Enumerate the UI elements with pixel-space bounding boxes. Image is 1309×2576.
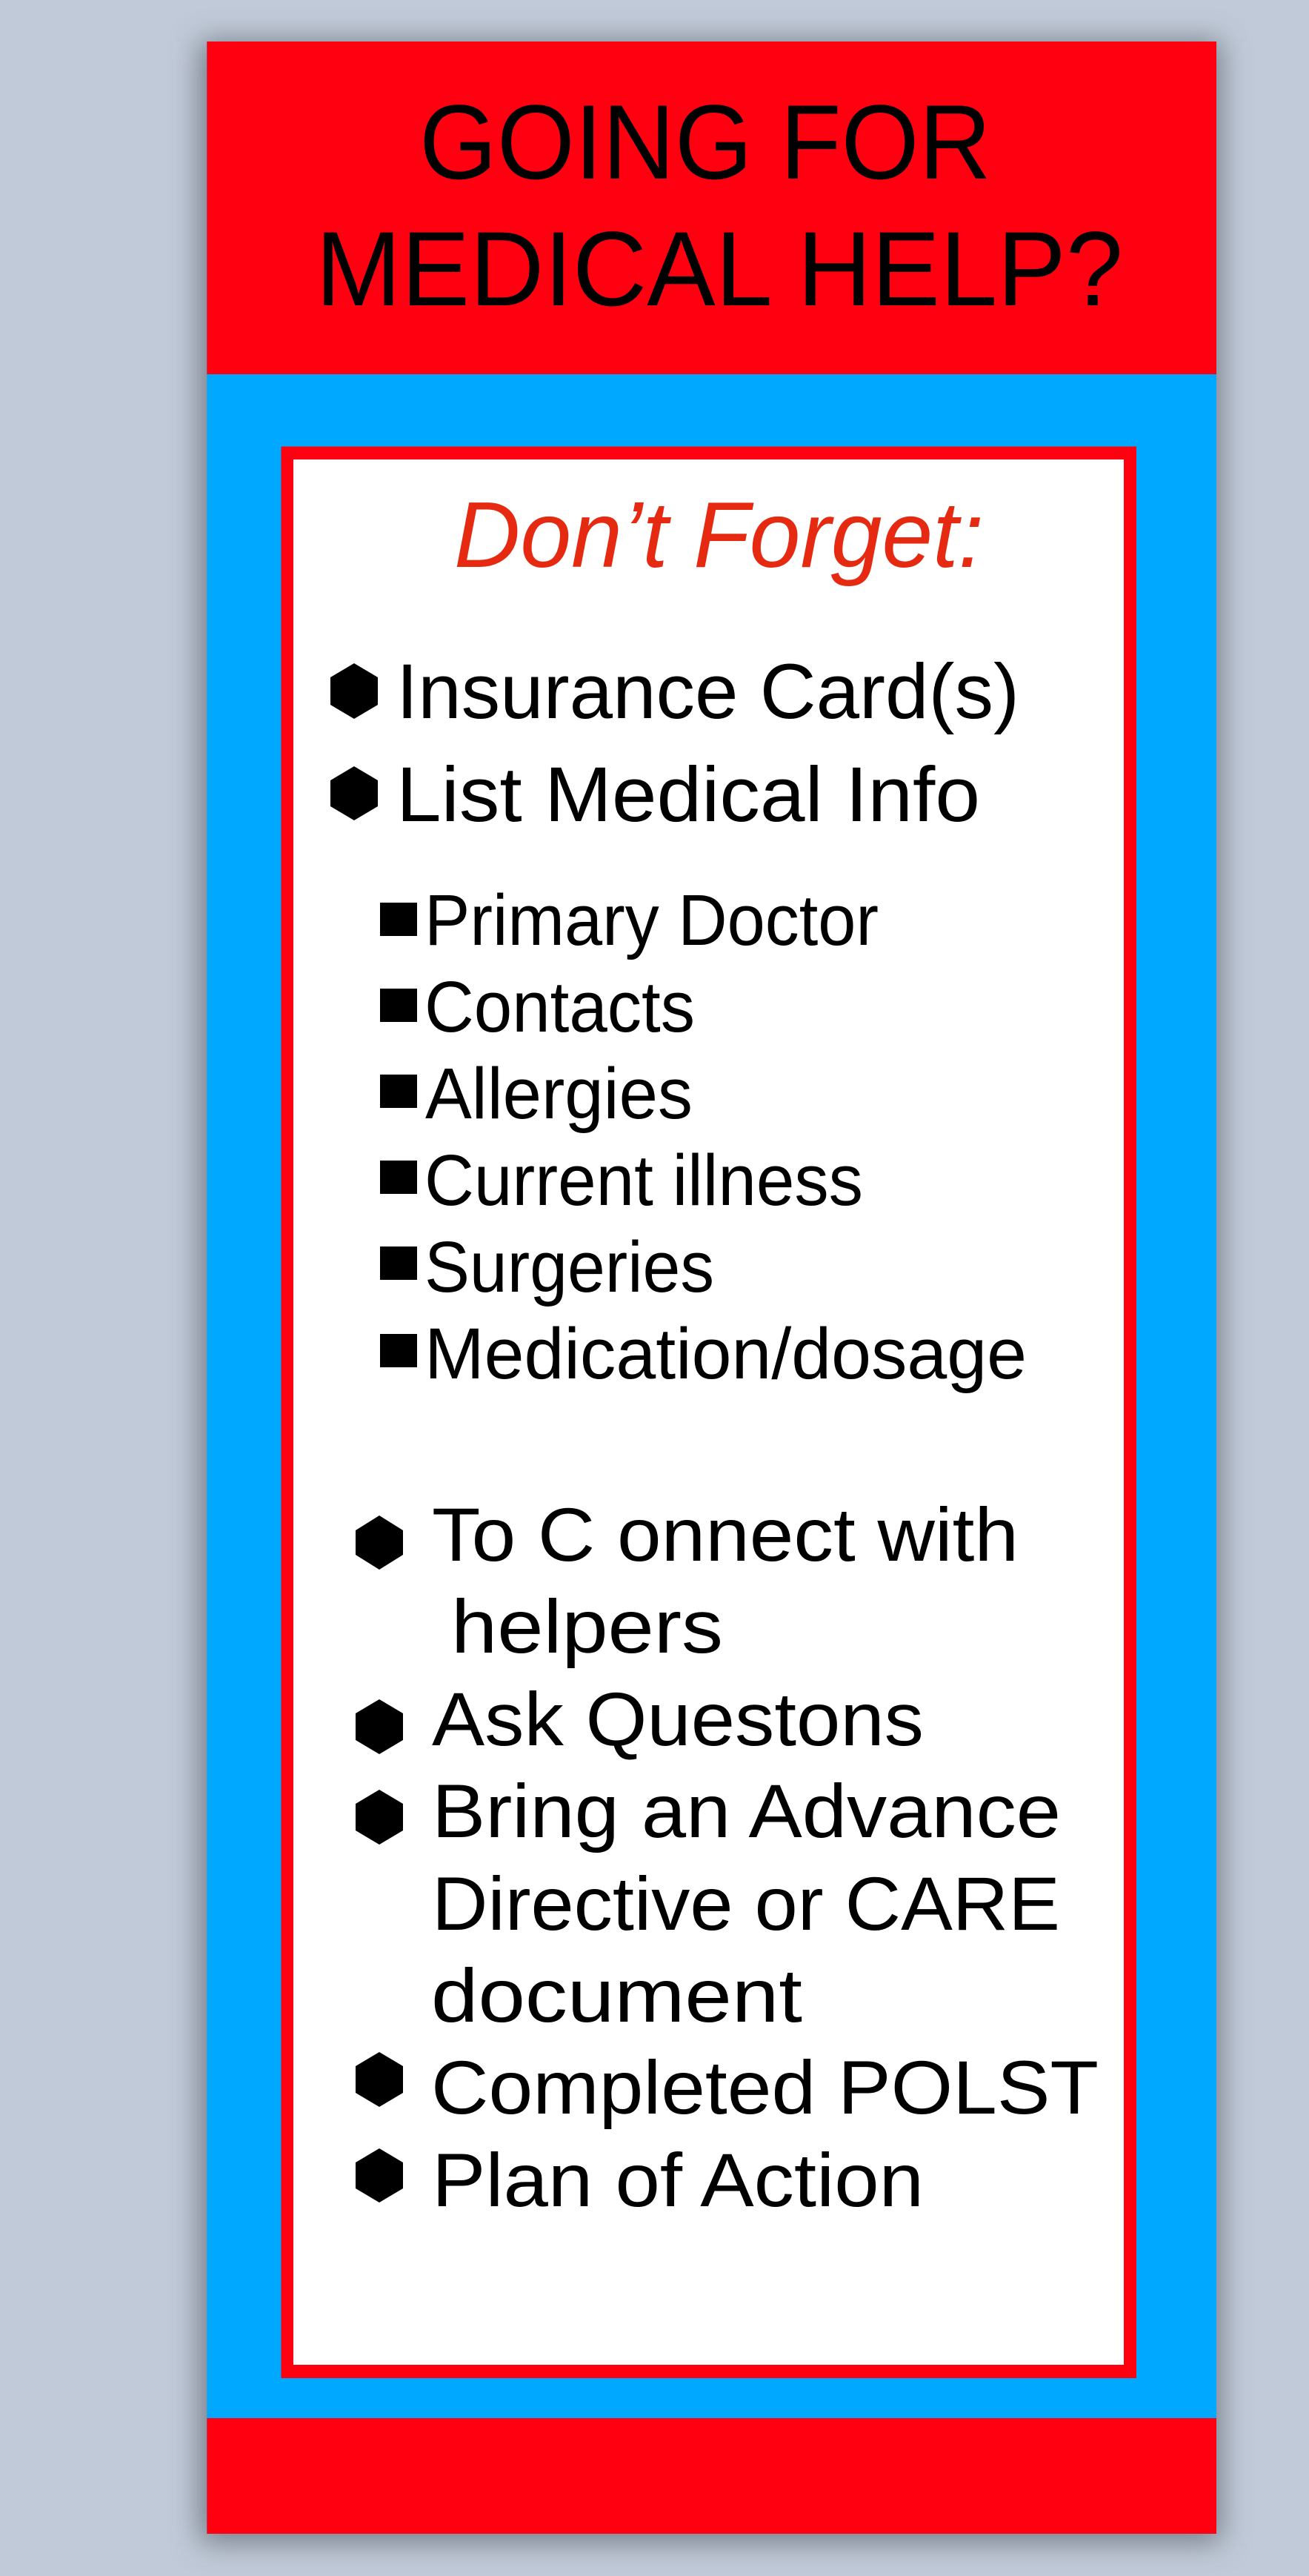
title: GOING FOR (419, 84, 991, 202)
item: plan of action: Plan of Action (432, 2138, 924, 2223)
sub-item: surgeries: Surgeries (424, 1226, 714, 1307)
sub-item: contacts: Contacts (424, 966, 695, 1047)
header band (207, 42, 1216, 374)
icon: square bullet (380, 989, 417, 1022)
sub-item: primary doctor: Primary Doctor (424, 880, 879, 960)
icon: square bullet (380, 903, 417, 936)
icon: hexagon bullet (330, 766, 378, 820)
icon: hexagon bullet (356, 2148, 403, 2202)
item: insurance cards: Insurance Card(s) (396, 648, 1019, 735)
icon: square bullet (380, 1161, 417, 1194)
icon: hexagon bullet (356, 1790, 403, 1845)
sub-item: allergies: Allergies (425, 1053, 693, 1134)
sub-item: medication/dosage: Medication/dosage (424, 1313, 1027, 1394)
icon: square bullet (380, 1246, 417, 1280)
item: advance directive (431, 1769, 1061, 2038)
item: advance directive: document (431, 1953, 802, 2038)
item: advance directive: Directive or CARE (432, 1862, 1060, 1946)
item: to connect with helpers (432, 1493, 1019, 1669)
sub-item: current illness: Current illness (424, 1140, 863, 1221)
footer band (207, 2418, 1216, 2534)
item: to connect with helpers: helpers (451, 1584, 723, 1669)
item: completed polst: Completed POLST (431, 2045, 1099, 2130)
heading: Don't Forget: Don’t Forget: (454, 482, 984, 587)
icon: hexagon bullet (356, 2052, 403, 2107)
brochure panel (207, 42, 1216, 2534)
item: list medical info: List Medical Info (396, 751, 980, 838)
title: MEDICAL HELP? (316, 210, 1123, 328)
icon: square bullet (380, 1075, 417, 1108)
icon: hexagon bullet (356, 1699, 403, 1754)
title (316, 84, 1123, 328)
item: to connect with helpers: To C onnect with (432, 1493, 1019, 1577)
icon: hexagon bullet (356, 1516, 403, 1570)
icon: hexagon bullet (330, 663, 378, 719)
icon: square bullet (380, 1334, 417, 1367)
checklist panel (282, 446, 1136, 2378)
sub-list: medical info (380, 880, 1027, 1394)
item: advance directive: Bring an Advance (432, 1769, 1061, 1853)
item: ask questons: Ask Questons (432, 1677, 924, 1762)
